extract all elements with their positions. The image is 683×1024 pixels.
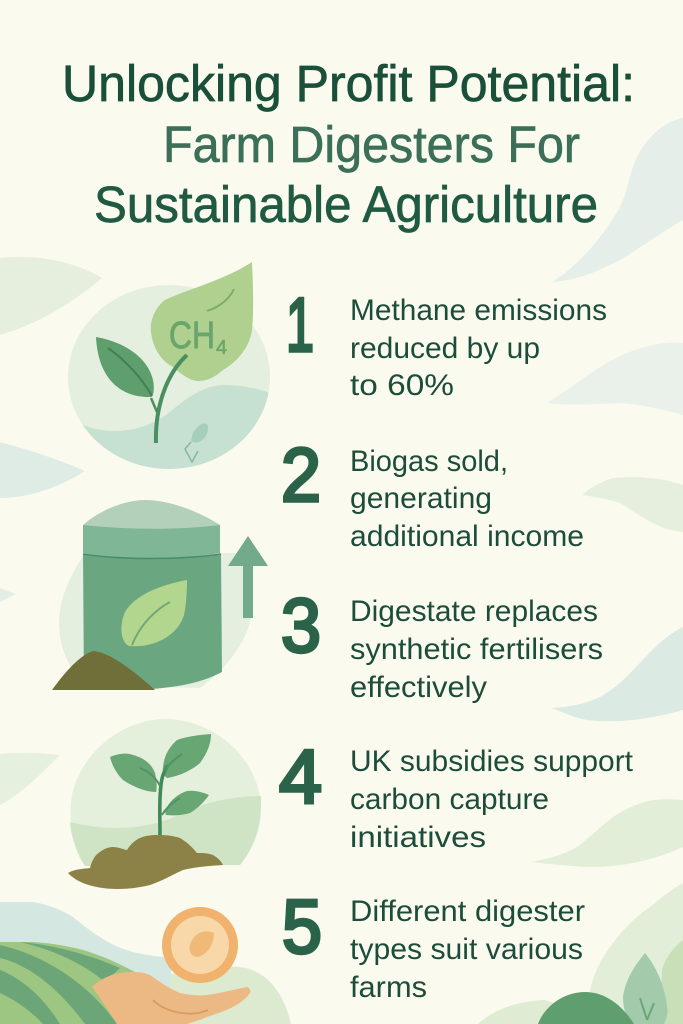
icon: seedling in soil	[68, 719, 261, 889]
number 3: 3	[281, 584, 321, 669]
number 2: 2	[281, 433, 321, 518]
illustration: bottom-right foliage	[478, 883, 683, 1024]
title: Unlocking Profit Potential:	[62, 55, 635, 112]
number 4: 4	[279, 735, 322, 820]
point 3 text: synthetic fertilisers	[350, 633, 603, 666]
point 2 text	[350, 445, 584, 553]
icon: methane leaf and sprout: 4	[216, 337, 227, 359]
point 4 text	[350, 745, 634, 854]
point 1 text: to 60%	[350, 369, 454, 402]
point 5 text: Different digester	[350, 895, 585, 928]
title: Sustainable Agriculture	[94, 176, 598, 233]
number 1: 1	[286, 283, 314, 368]
number 5: 5	[282, 885, 322, 970]
icon: methane leaf and sprout	[60, 262, 272, 480]
point 5 text	[350, 895, 585, 1004]
point 2 text: generating	[350, 482, 492, 515]
point 1 text: reduced by up	[350, 332, 540, 365]
title: Farm Digesters For	[163, 116, 580, 173]
point 1 text	[350, 294, 607, 402]
point 2 text: Biogas sold,	[350, 445, 508, 478]
title	[62, 55, 635, 233]
point 3 text: effectively	[350, 671, 487, 704]
point 2 text: additional income	[350, 520, 584, 553]
point 3 text	[350, 595, 603, 704]
point 5 text: types suit various	[350, 933, 583, 966]
point 3 text: Digestate replaces	[350, 595, 598, 628]
icon: digester tank	[52, 500, 268, 690]
background leaves	[0, 118, 683, 867]
point 4 text: initiatives	[350, 821, 486, 854]
point 5 text: farms	[350, 971, 427, 1004]
illustration: farm field, hand and coin	[0, 902, 291, 1024]
point 4 text: UK subsidies support	[350, 745, 634, 778]
icon: methane leaf and sprout: CH	[169, 315, 215, 357]
point 4 text: carbon capture	[350, 783, 549, 816]
point 1 text: Methane emissions	[350, 294, 607, 327]
